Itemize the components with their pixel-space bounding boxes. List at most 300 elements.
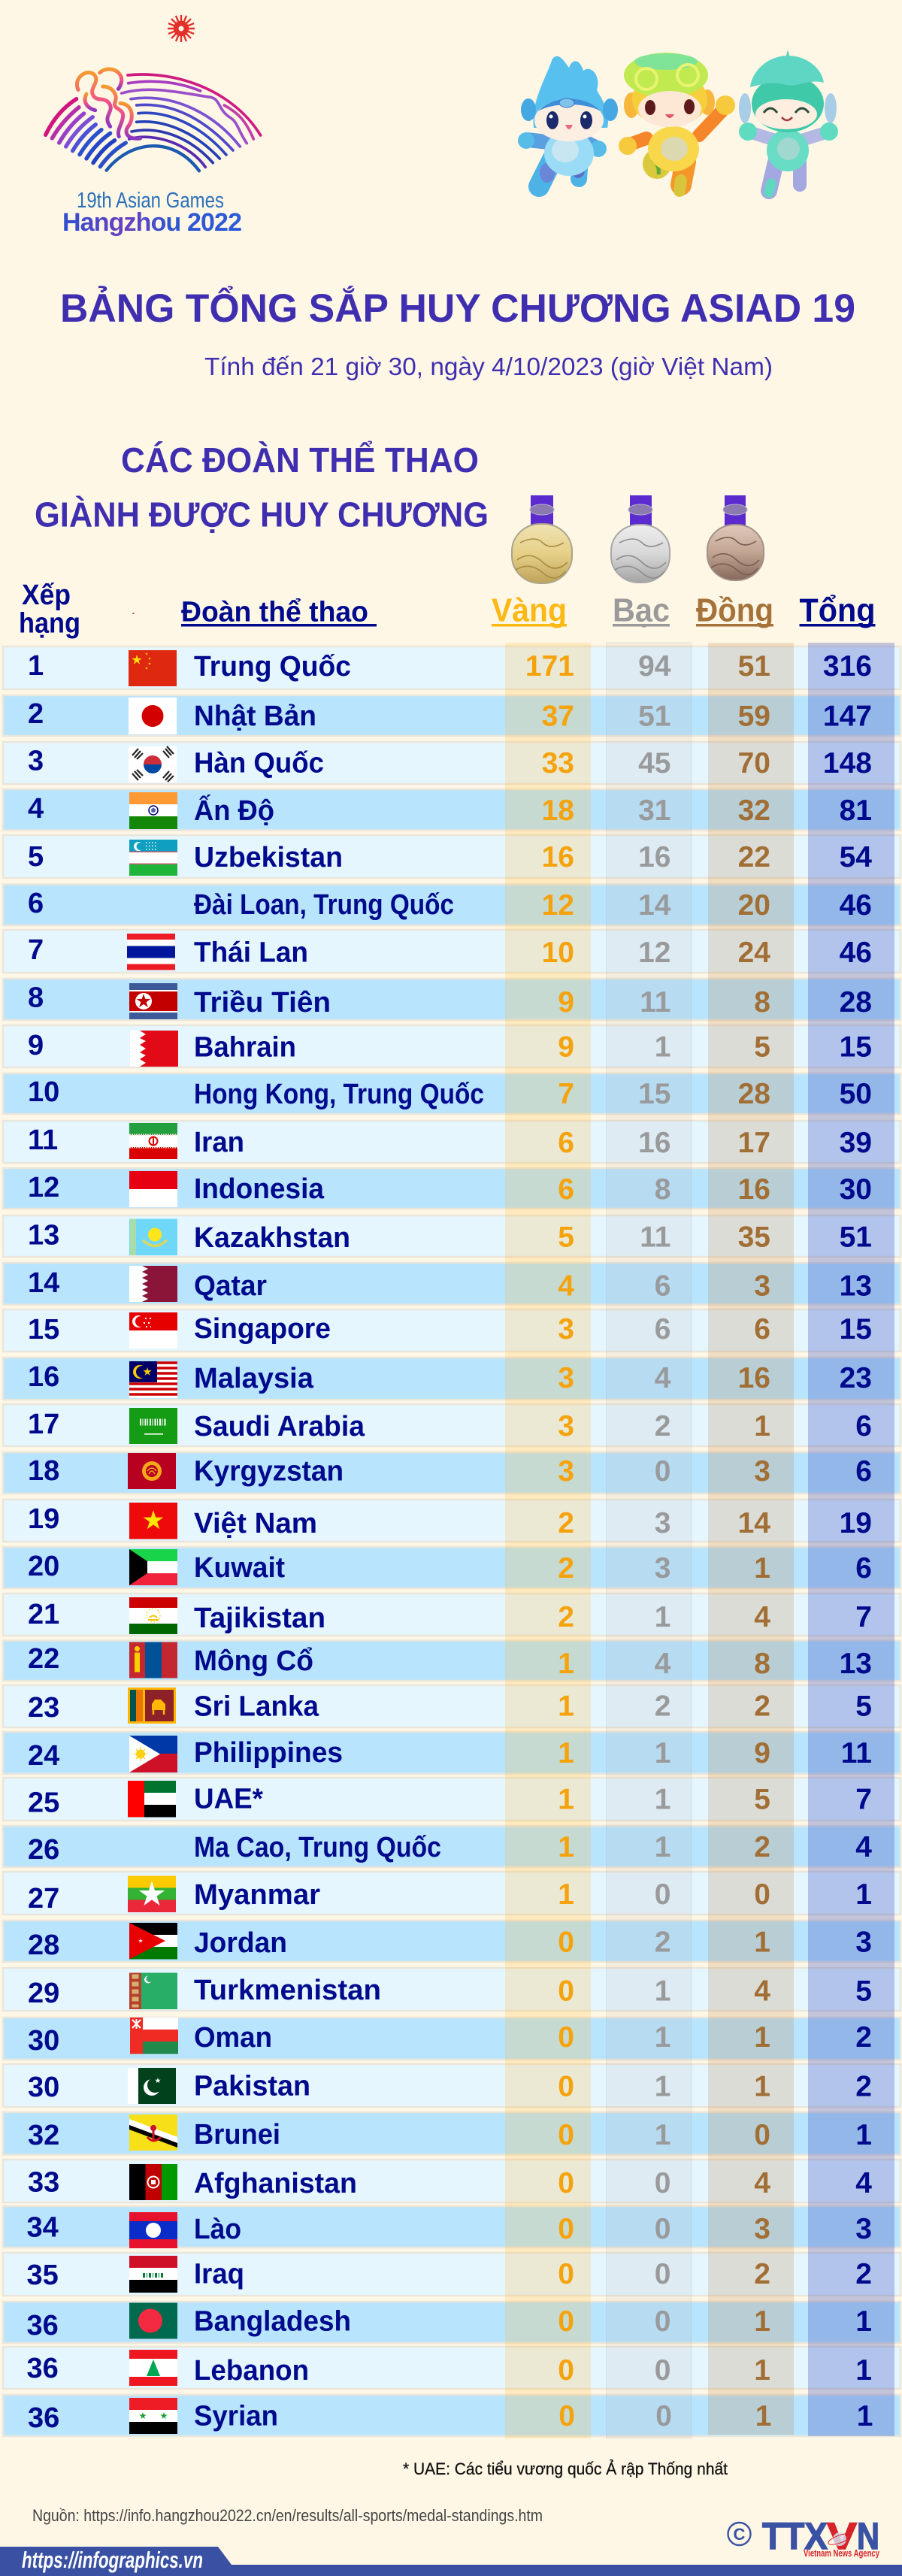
- row 18: Kyrgyzstan: 18: [28, 1455, 59, 1487]
- row 26: Ma Cao, Trung Quốc: 4: [855, 1831, 872, 1863]
- row 24: Philippines: [28, 1736, 872, 1772]
- row 19: Việt Nam: [28, 1503, 872, 1539]
- row 32: Brunei: 0: [754, 2119, 770, 2151]
- row 11: Iran: 16: [638, 1127, 670, 1159]
- row 5: Uzbekistan: 5: [28, 841, 44, 873]
- row 37: Lebanon: [27, 2350, 872, 2387]
- row 20: Kuwait: 2: [558, 1552, 574, 1585]
- row 33: Afghanistan: 4: [754, 2167, 770, 2199]
- row 4: Ấn Độ: 32: [738, 795, 770, 827]
- subtitle: Tính đến 21 giờ 30, ngày 4/10/2023 (giờ Việt Nam): [204, 353, 773, 380]
- flag: Sri Lanka: [128, 1688, 176, 1724]
- row 23: Sri Lanka: 2: [754, 1690, 770, 1723]
- flag: Kazakhstan: [129, 1219, 177, 1255]
- row 35: Iraq: 0: [558, 2258, 574, 2290]
- flag: Malaysia: [129, 1361, 177, 1398]
- row 14: Qatar: 14: [28, 1267, 59, 1299]
- flag: UAE: [128, 1781, 176, 1818]
- flag: Qatar: [129, 1266, 177, 1302]
- row 14: Qatar: 6: [655, 1270, 670, 1302]
- flag: Indonesia: [129, 1171, 177, 1207]
- row 5: Uzbekistan: 22: [738, 841, 770, 873]
- flag: Iran: [129, 1123, 177, 1159]
- row 24: Philippines: 1: [558, 1737, 574, 1769]
- row 22: Mông Cổ: 8: [754, 1648, 770, 1680]
- row 38: Syrian: 36: [28, 2402, 59, 2434]
- row 10: Hong Kong, Trung Quốc: 50: [840, 1078, 872, 1110]
- row 19: Việt Nam: 2: [558, 1507, 574, 1539]
- row 29: Turkmenistan: Turkmenistan: [194, 1975, 381, 2006]
- row 20: Kuwait: 6: [855, 1552, 872, 1585]
- row 25: UAE*: 5: [754, 1783, 770, 1816]
- row 35: Iraq: Iraq: [194, 2258, 244, 2290]
- row 38: Syrian: 1: [857, 2400, 873, 2432]
- row 38: Syrian: [28, 2398, 873, 2434]
- row 31: Pakistan: [28, 2068, 872, 2104]
- row 1: Trung Quốc: 51: [738, 650, 770, 683]
- row 11: Iran: 11: [28, 1125, 58, 1156]
- row 37: Lebanon: 1: [754, 2354, 770, 2387]
- row 34: Lào: 34: [27, 2211, 59, 2243]
- flag: Kuwait: [129, 1549, 177, 1585]
- row 30: Oman: 30: [28, 2025, 59, 2057]
- row 2: Nhật Bản: 2: [28, 698, 44, 730]
- row 11: Iran: 17: [738, 1127, 770, 1159]
- header: rank: Xếp: [22, 580, 71, 611]
- row 23: Sri Lanka: 23: [28, 1692, 59, 1724]
- row 31: Pakistan: 2: [855, 2070, 872, 2103]
- table header: [19, 580, 875, 639]
- row 21: Tajikistan: [28, 1597, 872, 1634]
- row 26: Ma Cao, Trung Quốc: 2: [754, 1831, 770, 1863]
- header: gold: Vàng: [492, 592, 567, 628]
- row 18: Kyrgyzstan: Kyrgyzstan: [194, 1455, 344, 1487]
- row 30: Oman: 2: [855, 2021, 872, 2054]
- row 7: Thái Lan: 7: [28, 934, 44, 966]
- logo text: 19th Asian Games: 19th Asian Games: [77, 189, 224, 213]
- row 17: Saudi Arabia: Saudi Arabia: [194, 1411, 365, 1442]
- row 21: Tajikistan: Tajikistan: [194, 1603, 325, 1634]
- row 16: Malaysia: 3: [558, 1362, 574, 1394]
- row 31: Pakistan: 1: [754, 2070, 770, 2103]
- row 1: Trung Quốc: 94: [638, 650, 671, 683]
- row 10: Hong Kong, Trung Quốc: [28, 1076, 872, 1110]
- row 19: Việt Nam: Việt Nam: [194, 1508, 317, 1539]
- row 3: Hàn Quốc: 33: [542, 747, 574, 779]
- row 8: Triều Tiên: 8: [754, 986, 770, 1019]
- row 16: Malaysia: [28, 1361, 872, 1398]
- row 13: Kazakhstan: [28, 1219, 872, 1255]
- row 9: Bahrain: 9: [28, 1030, 44, 1061]
- flag: Bangladesh: [129, 2303, 177, 2339]
- row 28: Jordan: 3: [855, 1926, 872, 1959]
- row 9: Bahrain: 1: [655, 1031, 670, 1063]
- row 21: Tajikistan: 2: [558, 1601, 574, 1633]
- flag: Turkmenistan: [129, 1972, 177, 2009]
- logo: TTXVN Vietnam News Agency: Vietnam News Agency: [804, 2548, 879, 2559]
- row 22: Mông Cổ: 1: [558, 1648, 574, 1680]
- row 34: Lào: [27, 2211, 872, 2248]
- row 6: Đài Loan, Trung Quốc: 20: [738, 889, 770, 922]
- footer bar: [0, 2547, 902, 2576]
- row 36: Bangladesh: Bangladesh: [194, 2306, 351, 2338]
- row 23: Sri Lanka: 2: [655, 1690, 670, 1723]
- header: bronze: Đồng: [696, 592, 773, 628]
- row 32: Brunei: 0: [558, 2119, 574, 2151]
- row 35: Iraq: 2: [754, 2258, 770, 2290]
- row 27: Myanmar: Myanmar: [194, 1879, 320, 1911]
- row 15: Singapore: 3: [558, 1313, 574, 1346]
- row 12: Indonesia: 12: [28, 1172, 59, 1203]
- flag: Lebanon: [129, 2350, 177, 2386]
- row 20: Kuwait: Kuwait: [194, 1552, 285, 1584]
- row 1: Trung Quốc: Trung Quốc: [194, 651, 351, 683]
- row 32: Brunei: 1: [855, 2119, 872, 2151]
- row 6: Đài Loan, Trung Quốc: [28, 888, 872, 922]
- row 27: Myanmar: 1: [558, 1878, 574, 1911]
- row 38: Syrian: 0: [558, 2400, 575, 2432]
- row 2: Nhật Bản: 51: [638, 701, 670, 732]
- row 14: Qatar: Qatar: [194, 1270, 267, 1302]
- row 9: Bahrain: 9: [558, 1031, 574, 1063]
- row 38: Syrian: Syrian: [194, 2401, 278, 2432]
- row 4: Ấn Độ: 31: [638, 795, 670, 827]
- row 26: Ma Cao, Trung Quốc: [28, 1831, 872, 1866]
- row 29: Turkmenistan: [28, 1972, 872, 2009]
- row 18: Kyrgyzstan: 6: [855, 1455, 872, 1488]
- flag: Philippines: [129, 1736, 177, 1772]
- row 33: Afghanistan: 4: [855, 2167, 872, 2199]
- row 14: Qatar: 13: [840, 1270, 872, 1302]
- flag: Afghanistan: [129, 2164, 177, 2200]
- row 33: Afghanistan: [28, 2164, 872, 2200]
- row 37: Lebanon: Lebanon: [194, 2355, 309, 2387]
- flag: Jordan: [129, 1923, 177, 1959]
- row 36: Bangladesh: 0: [655, 2305, 670, 2338]
- flag: Japan: [129, 698, 177, 734]
- row 27: Myanmar: 1: [855, 1878, 872, 1911]
- logo: TTXVN Vietnam News Agency: TTX: [762, 2515, 828, 2557]
- row 10: Hong Kong, Trung Quốc: 7: [558, 1078, 574, 1110]
- flag: Kyrgyzstan: [128, 1453, 176, 1489]
- row 16: Malaysia: 16: [28, 1361, 59, 1393]
- row 6: Đài Loan, Trung Quốc: 46: [840, 889, 872, 922]
- row 25: UAE*: 1: [558, 1783, 574, 1816]
- row 8: Triều Tiên: 11: [640, 986, 670, 1019]
- row 13: Kazakhstan: 13: [28, 1219, 59, 1251]
- row 5: Uzbekistan: [28, 840, 872, 876]
- row 30: Oman: [28, 2018, 872, 2057]
- row 14: Qatar: 4: [558, 1270, 574, 1302]
- row 26: Ma Cao, Trung Quốc: 26: [28, 1834, 59, 1866]
- row 33: Afghanistan: 33: [28, 2166, 59, 2198]
- row 5: Uzbekistan: Uzbekistan: [194, 842, 343, 873]
- row 30: Oman: 1: [754, 2021, 770, 2054]
- row 26: Ma Cao, Trung Quốc: Ma Cao, Trung Quốc: [194, 1832, 441, 1863]
- row 13: Kazakhstan: 11: [640, 1221, 670, 1254]
- flag: China: [129, 650, 177, 686]
- row 12: Indonesia: 30: [840, 1173, 872, 1206]
- row 1: Trung Quốc: 316: [823, 650, 872, 683]
- footnote: * UAE: Các tiểu vương quốc Ả rập Thống nhất: [403, 2459, 728, 2478]
- header: rank: [19, 580, 80, 639]
- row 27: Myanmar: 0: [655, 1878, 670, 1911]
- row 18: Kyrgyzstan: [28, 1453, 872, 1489]
- row 12: Indonesia: 6: [558, 1173, 574, 1206]
- row 18: Kyrgyzstan: 3: [558, 1455, 574, 1488]
- logo text: Hangzhou 2022: Hangzhou 2022: [62, 208, 242, 237]
- row 4: Ấn Độ: 81: [840, 795, 872, 827]
- row 2: Nhật Bản: 147: [823, 701, 872, 732]
- row 7: Thái Lan: [28, 934, 872, 970]
- row 19: Việt Nam: 19: [840, 1507, 872, 1539]
- row 15: Singapore: Singapore: [194, 1313, 331, 1345]
- row 17: Saudi Arabia: 1: [754, 1410, 770, 1442]
- row 31: Pakistan: 30: [28, 2072, 59, 2103]
- row 36: Bangladesh: 36: [27, 2310, 59, 2341]
- row 23: Sri Lanka: 1: [558, 1690, 574, 1723]
- icon: bronze medal: [707, 495, 764, 580]
- row 18: Kyrgyzstan: 3: [754, 1455, 770, 1488]
- header: silver: Bạc: [613, 592, 670, 628]
- row 5: Uzbekistan: 16: [542, 841, 574, 873]
- row 33: Afghanistan: 0: [558, 2167, 574, 2199]
- row 35: Iraq: 2: [855, 2258, 872, 2290]
- flag: Vietnam: [129, 1503, 177, 1539]
- header: rank: hạng: [19, 607, 80, 639]
- table row backgrounds: [3, 646, 900, 2436]
- row 9: Bahrain: 5: [754, 1031, 770, 1063]
- row 19: Việt Nam: 14: [738, 1507, 770, 1539]
- row 6: Đài Loan, Trung Quốc: 6: [28, 888, 44, 919]
- flag: North Korea: [129, 983, 177, 1019]
- row 17: Saudi Arabia: [28, 1408, 872, 1444]
- flag: Saudi Arabia: [129, 1408, 177, 1444]
- row 28: Jordan: 0: [558, 1926, 574, 1959]
- row 22: Mông Cổ: 4: [655, 1648, 671, 1680]
- row 25: UAE*: UAE*: [194, 1783, 263, 1815]
- logo: TTXVN Vietnam News Agency: C: [734, 2525, 746, 2544]
- icon: silver medal: [611, 495, 670, 583]
- row 25: UAE*: 7: [855, 1783, 872, 1816]
- row 19: Việt Nam: 3: [655, 1507, 670, 1539]
- row 12: Indonesia: 8: [655, 1173, 670, 1206]
- row 1: Trung Quốc: [28, 650, 872, 686]
- row 8: Triều Tiên: 28: [840, 986, 872, 1019]
- row 17: Saudi Arabia: 17: [28, 1409, 59, 1440]
- row 5: Uzbekistan: 16: [638, 841, 670, 873]
- row 3: Hàn Quốc: Hàn Quốc: [194, 747, 324, 779]
- row 35: Iraq: [27, 2256, 872, 2293]
- row 27: Myanmar: 27: [28, 1883, 59, 1915]
- row 10: Hong Kong, Trung Quốc: Hong Kong, Trung Quốc: [194, 1079, 484, 1110]
- row 28: Jordan: [28, 1923, 872, 1961]
- row 15: Singapore: 15: [840, 1313, 872, 1346]
- row 14: Qatar: 3: [754, 1270, 770, 1302]
- flag: Uzbekistan: [129, 840, 177, 876]
- row 3: Hàn Quốc: 45: [638, 747, 670, 779]
- row 9: Bahrain: Bahrain: [194, 1031, 296, 1063]
- row 19: Việt Nam: 19: [28, 1503, 59, 1535]
- row 34: Lào: 0: [558, 2213, 574, 2245]
- row 16: Malaysia: 16: [738, 1362, 770, 1394]
- row 7: Thái Lan: 24: [738, 937, 770, 969]
- row 33: Afghanistan: Afghanistan: [194, 2168, 357, 2199]
- row 7: Thái Lan: 46: [840, 937, 872, 969]
- flag: South Korea: [129, 746, 177, 782]
- row 28: Jordan: 28: [28, 1930, 59, 1961]
- row 23: Sri Lanka: 5: [855, 1690, 872, 1723]
- row 10: Hong Kong, Trung Quốc: 15: [638, 1078, 670, 1110]
- row 30: Oman: 0: [558, 2021, 574, 2054]
- flag: Thailand: [127, 934, 175, 970]
- column highlight bands: [505, 643, 894, 2438]
- row 21: Tajikistan: 21: [28, 1599, 59, 1630]
- flag: Oman: [130, 2018, 178, 2054]
- row 9: Bahrain: [28, 1030, 872, 1067]
- row 21: Tajikistan: 7: [855, 1601, 872, 1633]
- section heading: [35, 440, 489, 534]
- flag: Brunei: [129, 2114, 177, 2151]
- row 37: Lebanon: 36: [27, 2353, 59, 2384]
- row 21: Tajikistan: 1: [655, 1601, 670, 1633]
- mascot: blue Congcong: [518, 56, 618, 186]
- row 34: Lào: 0: [655, 2213, 670, 2245]
- row 8: Triều Tiên: 8: [28, 982, 44, 1013]
- row 27: Myanmar: [28, 1876, 872, 1915]
- row 29: Turkmenistan: 0: [558, 1975, 574, 2007]
- row 32: Brunei: 32: [28, 2120, 59, 2151]
- row 38: Syrian: 0: [655, 2400, 672, 2432]
- row 10: Hong Kong, Trung Quốc: 28: [738, 1078, 770, 1110]
- icon: red sun emblem: [168, 15, 195, 42]
- row 6: Đài Loan, Trung Quốc: 12: [542, 889, 574, 922]
- flag: Iraq: [129, 2256, 177, 2293]
- row 32: Brunei: Brunei: [194, 2119, 280, 2151]
- row 32: Brunei: [28, 2114, 872, 2151]
- row 15: Singapore: 15: [28, 1314, 59, 1346]
- row 26: Ma Cao, Trung Quốc: 1: [655, 1831, 670, 1863]
- row 3: Hàn Quốc: 70: [738, 747, 770, 779]
- row 11: Iran: 39: [840, 1127, 872, 1159]
- row 8: Triều Tiên: Triều Tiên: [194, 987, 331, 1019]
- row 37: Lebanon: 1: [855, 2354, 872, 2387]
- row 25: UAE*: [28, 1781, 872, 1819]
- row 28: Jordan: 1: [754, 1926, 770, 1959]
- row 4: Ấn Độ: 18: [542, 795, 574, 827]
- row 34: Lào: 3: [754, 2213, 770, 2245]
- row 2: Nhật Bản: Nhật Bản: [194, 701, 316, 732]
- logo: TTXVN Vietnam News Agency: N: [857, 2515, 879, 2557]
- row 33: Afghanistan: 0: [655, 2167, 670, 2199]
- row 18: Kyrgyzstan: 0: [655, 1455, 670, 1488]
- row 36: Bangladesh: [27, 2303, 872, 2341]
- row 29: Turkmenistan: 5: [855, 1975, 872, 2007]
- row 32: Brunei: 1: [655, 2119, 670, 2151]
- row 7: Thái Lan: Thái Lan: [194, 937, 308, 968]
- row 13: Kazakhstan: 51: [840, 1221, 872, 1254]
- row 11: Iran: Iran: [194, 1127, 244, 1158]
- row 24: Philippines: 1: [655, 1737, 670, 1769]
- row 4: Ấn Độ: [28, 792, 872, 829]
- row 22: Mông Cổ: [28, 1642, 872, 1680]
- row 17: Saudi Arabia: 2: [655, 1410, 670, 1442]
- row 29: Turkmenistan: 29: [28, 1978, 59, 2009]
- flag: Tajikistan: [129, 1597, 177, 1634]
- section heading: CÁC ĐOÀN THỂ THAO: [121, 440, 479, 480]
- flag: Syria: [129, 2398, 177, 2434]
- logo: Hangzhou 2022 Asian Games: [46, 69, 261, 237]
- row 7: Thái Lan: 10: [542, 937, 574, 969]
- row 11: Iran: 6: [558, 1127, 574, 1159]
- header: delegation: Đoàn thể thao: [181, 597, 368, 628]
- header: total: Tổng: [800, 592, 875, 628]
- row 6: Đài Loan, Trung Quốc: Đài Loan, Trung Quốc: [194, 889, 454, 921]
- row 22: Mông Cổ: 22: [28, 1643, 59, 1675]
- row 21: Tajikistan: 4: [754, 1601, 770, 1633]
- flag: Singapore: [129, 1312, 177, 1349]
- flag: Pakistan: [128, 2068, 176, 2104]
- row 28: Jordan: 2: [655, 1926, 670, 1959]
- row 15: Singapore: 6: [754, 1313, 770, 1346]
- section heading: GIÀNH ĐƯỢC HUY CHƯƠNG: [35, 495, 489, 534]
- row 31: Pakistan: 0: [558, 2070, 574, 2103]
- flag: India: [129, 792, 177, 829]
- row 25: UAE*: 25: [28, 1787, 59, 1819]
- row 23: Sri Lanka: Sri Lanka: [194, 1691, 319, 1723]
- row 24: Philippines: 24: [28, 1740, 59, 1772]
- row 31: Pakistan: 1: [655, 2070, 670, 2103]
- row 17: Saudi Arabia: 3: [558, 1410, 574, 1442]
- row 7: Thái Lan: 12: [638, 937, 670, 969]
- row 8: Triều Tiên: [28, 982, 872, 1019]
- source: Nguồn: https://info.hangzhou2022.cn/en/results/all-sports/medal-standings.htm: [32, 2506, 543, 2525]
- row 13: Kazakhstan: 5: [558, 1221, 574, 1254]
- row 12: Indonesia: [28, 1171, 872, 1207]
- row 20: Kuwait: 3: [655, 1552, 670, 1585]
- row 3: Hàn Quốc: [28, 746, 872, 782]
- row 13: Kazakhstan: 35: [738, 1221, 770, 1254]
- row 38: Syrian: 1: [755, 2400, 771, 2432]
- row 34: Lào: Lào: [194, 2214, 241, 2245]
- row 35: Iraq: 0: [655, 2258, 670, 2290]
- flag: Bahrain: [130, 1031, 178, 1067]
- footer url: https://infographics.vn: [22, 2547, 203, 2573]
- row 37: Lebanon: 0: [655, 2354, 670, 2387]
- row 34: Lào: 3: [855, 2213, 872, 2245]
- title: BẢNG TỔNG SẮP HUY CHƯƠNG ASIAD 19: [60, 285, 855, 331]
- row 16: Malaysia: 4: [655, 1362, 671, 1394]
- row 6: Đài Loan, Trung Quốc: 14: [638, 889, 671, 922]
- row 29: Turkmenistan: 4: [754, 1975, 770, 2007]
- row 12: Indonesia: 16: [738, 1173, 770, 1206]
- mascots: [518, 50, 838, 192]
- row 30: Oman: 1: [655, 2021, 670, 2054]
- row 22: Mông Cổ: Mông Cổ: [194, 1645, 313, 1677]
- row 2: Nhật Bản: 37: [542, 701, 574, 732]
- row 24: Philippines: 11: [841, 1737, 872, 1769]
- row 4: Ấn Độ: Ấn Độ: [194, 794, 274, 827]
- row 29: Turkmenistan: 1: [655, 1975, 670, 2007]
- row 16: Malaysia: 23: [840, 1362, 872, 1394]
- logo: TTXVN Vietnam News Agency: V: [827, 2515, 858, 2557]
- row 3: Hàn Quốc: 3: [28, 746, 44, 777]
- mascot: yellow Lianlian: [619, 53, 735, 191]
- row 20: Kuwait: 20: [28, 1551, 59, 1582]
- row 8: Triều Tiên: 9: [558, 986, 574, 1019]
- row 31: Pakistan: Pakistan: [194, 2070, 310, 2102]
- row 3: Hàn Quốc: 148: [823, 747, 872, 779]
